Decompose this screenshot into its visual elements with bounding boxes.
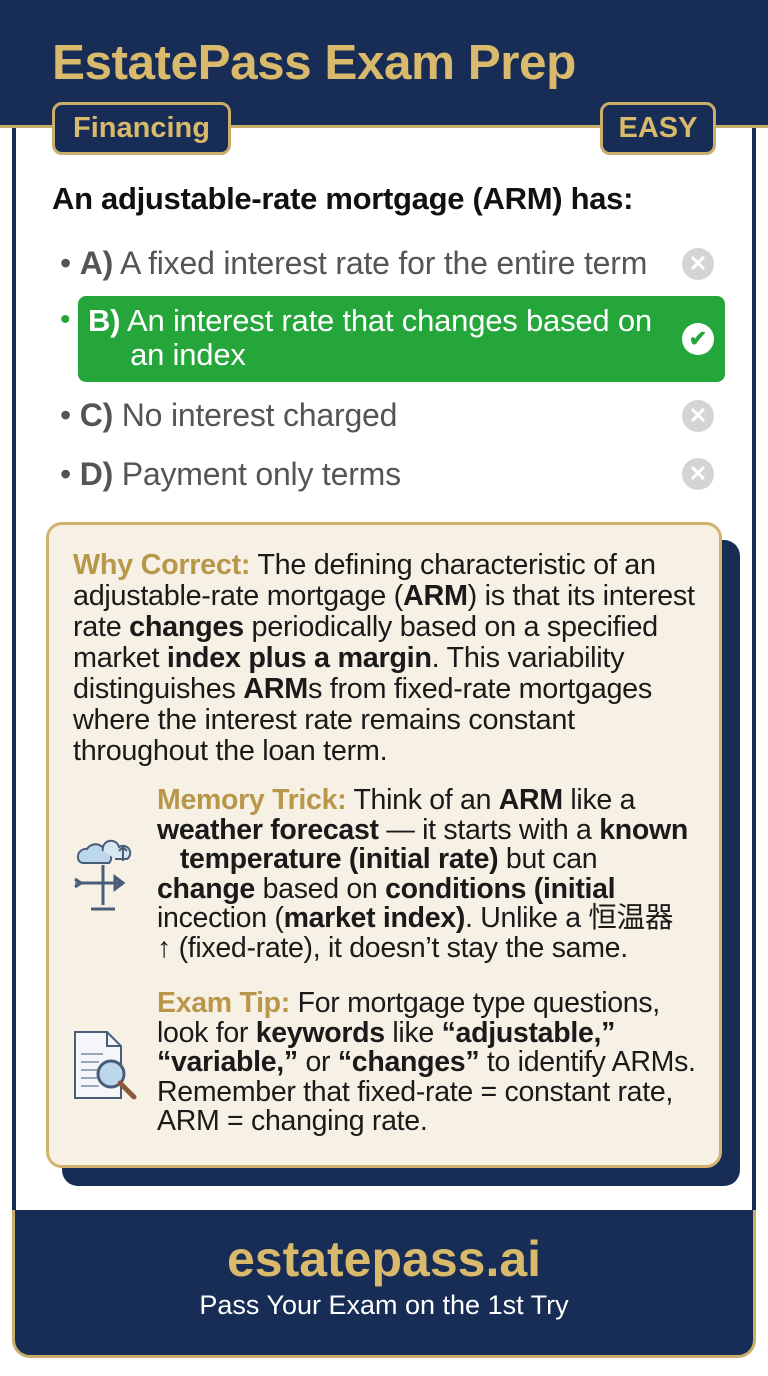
icon: check: ✔ xyxy=(689,326,707,351)
icon: wrong C xyxy=(682,400,714,432)
badge: difficulty: EASY xyxy=(618,112,697,144)
why correct text: throughout the loan term. xyxy=(73,735,387,767)
badge: category xyxy=(52,102,231,155)
why correct text: rate changes periodically based on a specified xyxy=(73,611,658,643)
explanation shadow xyxy=(62,540,740,1186)
footer tagline: Pass Your Exam on the 1st Try xyxy=(199,1290,569,1320)
question: An adjustable-rate mortgage (ARM) has: xyxy=(52,181,633,216)
icon: weather vane xyxy=(74,840,132,910)
footer xyxy=(12,1210,756,1358)
exam tip text: ARM = changing rate. xyxy=(157,1105,427,1137)
badge: difficulty xyxy=(600,102,716,155)
memory trick text: Memory Trick: Think of an ARM like a xyxy=(157,784,635,816)
text: • xyxy=(60,303,71,336)
why correct text xyxy=(73,549,695,767)
memory trick text: temperature (initial rate) but can xyxy=(180,843,597,875)
memory trick text: ↑ (fixed-rate), it doesn’t stay the same. xyxy=(157,932,628,964)
memory trick text: weather forecast — it starts with a known xyxy=(157,814,688,846)
why correct text: where the interest rate remains constant xyxy=(73,704,575,736)
icon: wrong D: ✕ xyxy=(689,461,707,486)
exam tip text: look for keywords like “adjustable,” xyxy=(157,1016,615,1048)
exam tip text xyxy=(157,987,696,1137)
why correct text: Why Correct: The defining characteristic of an xyxy=(73,549,656,581)
explanation panel xyxy=(46,522,722,1168)
title: EstatePass Exam Prep xyxy=(52,35,576,90)
memory trick text: change based on conditions (initial xyxy=(157,872,615,904)
why correct text: adjustable-rate mortgage (ARM) is that its interest xyxy=(73,580,695,612)
icon: check xyxy=(682,323,714,355)
option B text: an index xyxy=(130,337,246,372)
main card xyxy=(12,128,756,1218)
badge: category: Financing xyxy=(73,112,210,144)
icon: wrong A: ✕ xyxy=(689,251,707,276)
header bar xyxy=(0,0,768,128)
option B text: B) An interest rate that changes based on xyxy=(88,303,652,338)
why correct text: distinguishes ARMs from fixed-rate mortgages xyxy=(73,673,652,705)
memory trick text xyxy=(156,784,688,964)
icon: document magnifier xyxy=(74,1031,136,1100)
option D: • D) Payment only terms xyxy=(60,456,401,492)
icon: wrong C: ✕ xyxy=(689,403,707,428)
icon: wrong A xyxy=(682,248,714,280)
footer brand: estatepass.ai xyxy=(227,1231,541,1287)
option A: • A) A fixed interest rate for the entire term xyxy=(60,245,647,281)
exam tip text: Remember that fixed-rate = constant rate, xyxy=(157,1076,673,1108)
icon: wrong D xyxy=(682,458,714,490)
exam tip text: Exam Tip: For mortgage type questions, xyxy=(157,987,660,1019)
exam tip text: “variable,” or “changes” to identify ARMs. xyxy=(157,1046,696,1078)
option C: • C) No interest charged xyxy=(60,397,397,433)
why correct text: market index plus a margin. This variability xyxy=(73,642,624,674)
option B text xyxy=(88,303,652,372)
memory trick text: incection (market index). Unlike a 恒温器 xyxy=(157,902,673,934)
option B correct xyxy=(78,296,725,382)
